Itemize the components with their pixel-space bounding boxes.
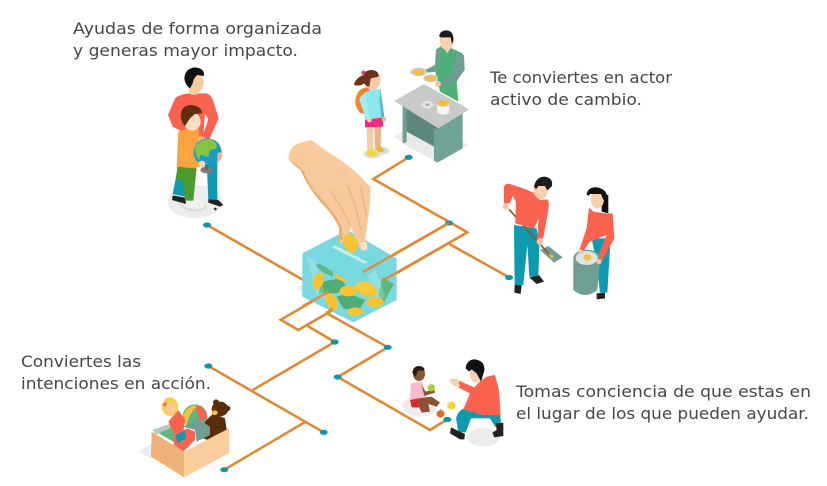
- illustration: man with shovel and woman with bin: [503, 177, 614, 299]
- server: [435, 45, 464, 102]
- heading text: active actor: Te conviertes en actor: [489, 68, 672, 87]
- box highlights: [307, 256, 327, 300]
- heading text: awareness: [515, 382, 811, 423]
- heading text: awareness: Tomas conciencia de que estas en: [515, 382, 811, 401]
- woman: [602, 195, 608, 213]
- box top face: [302, 230, 397, 284]
- illustration: man kneeling and child with blocks: [403, 359, 503, 447]
- heading text: organized help: y generas mayor impacto.: [73, 41, 298, 60]
- girl: [367, 126, 373, 152]
- hand: [288, 140, 371, 251]
- illustration: hand dropping coin into transparent box: [288, 140, 397, 322]
- connector lines behind box: [207, 157, 509, 470]
- heading text: active actor: activo de cambio.: [490, 90, 642, 109]
- heading text: intentions into action: Conviertes las: [21, 352, 141, 371]
- heading text: intentions into action: [21, 352, 211, 393]
- heading text: organized help: [73, 19, 322, 60]
- illustration: box of toys: [138, 397, 230, 477]
- heading text: awareness: el lugar de los que pueden ayudar.: [516, 404, 809, 423]
- heading text: intentions into action: intenciones en acción.: [21, 374, 211, 393]
- donation box back: [302, 230, 397, 322]
- heading text: organized help: Ayudas de forma organizada: [73, 19, 322, 38]
- table: [403, 108, 437, 163]
- heading text: active actor: [489, 68, 672, 109]
- illustration: girl and server at table: [354, 30, 469, 163]
- connector lines over box: [303, 223, 467, 313]
- connector end dots: [203, 155, 513, 472]
- illustration: man and boy with globe: [168, 67, 223, 218]
